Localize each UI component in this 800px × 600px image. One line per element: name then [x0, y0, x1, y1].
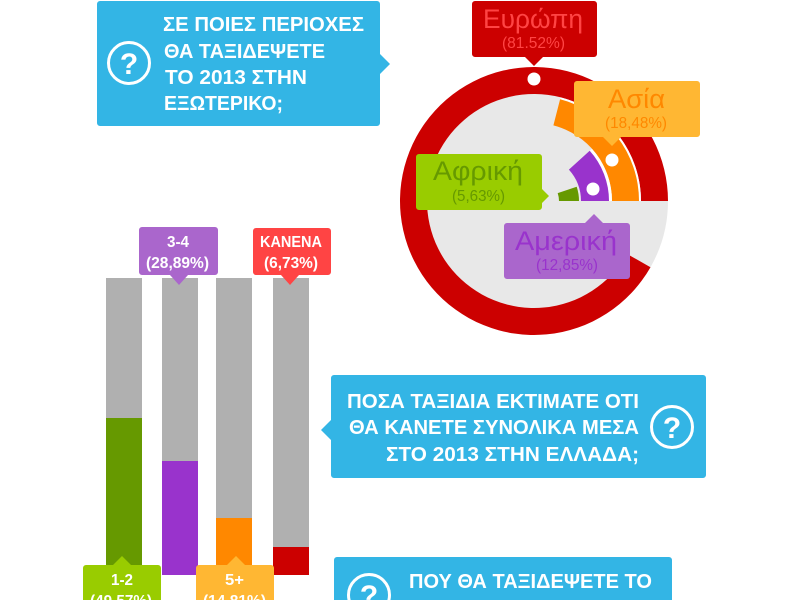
- callout: Asia: Ασία: [608, 84, 665, 114]
- callout: Africa: [416, 154, 549, 210]
- callout: Europe: [472, 1, 597, 66]
- callout: America: [504, 214, 630, 279]
- callout: none: [253, 228, 331, 285]
- callout: Africa: Αφρική: [433, 156, 523, 186]
- callout: Asia: (18,48%): [605, 115, 667, 132]
- callout: 5+: 5+: [225, 572, 244, 589]
- callout: 3-4: 3-4: [167, 234, 189, 251]
- callout: Africa: (5,63%): [452, 188, 505, 205]
- bar: 5+ trips: [216, 278, 252, 575]
- panel: question on trips within Greece: ΠΟΣΑ ΤΑΞΙΔΙΑ ΕΚΤΙΜΑΤΕ ΟΤΙ: [347, 391, 639, 413]
- callout: none: (6,73%): [264, 255, 318, 272]
- panel: question on trips within Greece: ΣΤΟ 2013 ΣΤΗΝ ΕΛΛΑΔΑ;: [386, 444, 639, 466]
- callout: Europe: Ευρώπη: [483, 4, 583, 34]
- callout: Asia: [574, 81, 700, 146]
- panel: question on where you will travel: ΠΟΥ ΘΑ ΤΑΞΙΔΕΨΕΤΕ ΤΟ: [409, 571, 652, 593]
- callout: America: Αμερική: [515, 226, 617, 256]
- panel: question on trips within Greece: [321, 375, 706, 478]
- callout: America: (12,85%): [536, 257, 598, 274]
- bar: 3-4 trips: [162, 278, 198, 575]
- callout: none: ΚΑΝΕΝΑ: [260, 234, 322, 251]
- radial chart: destinations abroad: [400, 67, 668, 335]
- callout: Europe: (81.52%): [502, 35, 565, 52]
- bar: no trips: [273, 278, 309, 575]
- panel: question on destinations abroad: ΤΟ 2013 ΣΤΗΝ: [165, 67, 307, 89]
- panel: question on destinations abroad: [97, 1, 390, 126]
- panel: question on destinations abroad: ΣΕ ΠΟΙΕΣ ΠΕΡΙΟΧΕΣ: [163, 14, 364, 36]
- callout: 1-2: 1-2: [111, 572, 133, 589]
- callout: 3-4: [139, 227, 218, 285]
- panel: question on trips within Greece: ?: [663, 412, 681, 445]
- panel: question on destinations abroad: ΘΑ ΤΑΞΙΔΕΨΕΤΕ: [164, 41, 325, 63]
- callout: 5+: [196, 556, 274, 600]
- panel: question on destinations abroad: ΕΞΩΤΕΡΙΚΟ;: [164, 93, 283, 115]
- panel: question on destinations abroad: ?: [120, 48, 138, 81]
- callout: 3-4: (28,89%): [146, 255, 209, 272]
- panel: question on trips within Greece: ΘΑ ΚΑΝΕΤΕ ΣΥΝΟΛΙΚΑ ΜΕΣΑ: [349, 417, 639, 439]
- panel: question on where you will travel: [334, 557, 672, 600]
- bar: 1-2 trips: [106, 278, 142, 575]
- callout: 1-2: [83, 556, 161, 600]
